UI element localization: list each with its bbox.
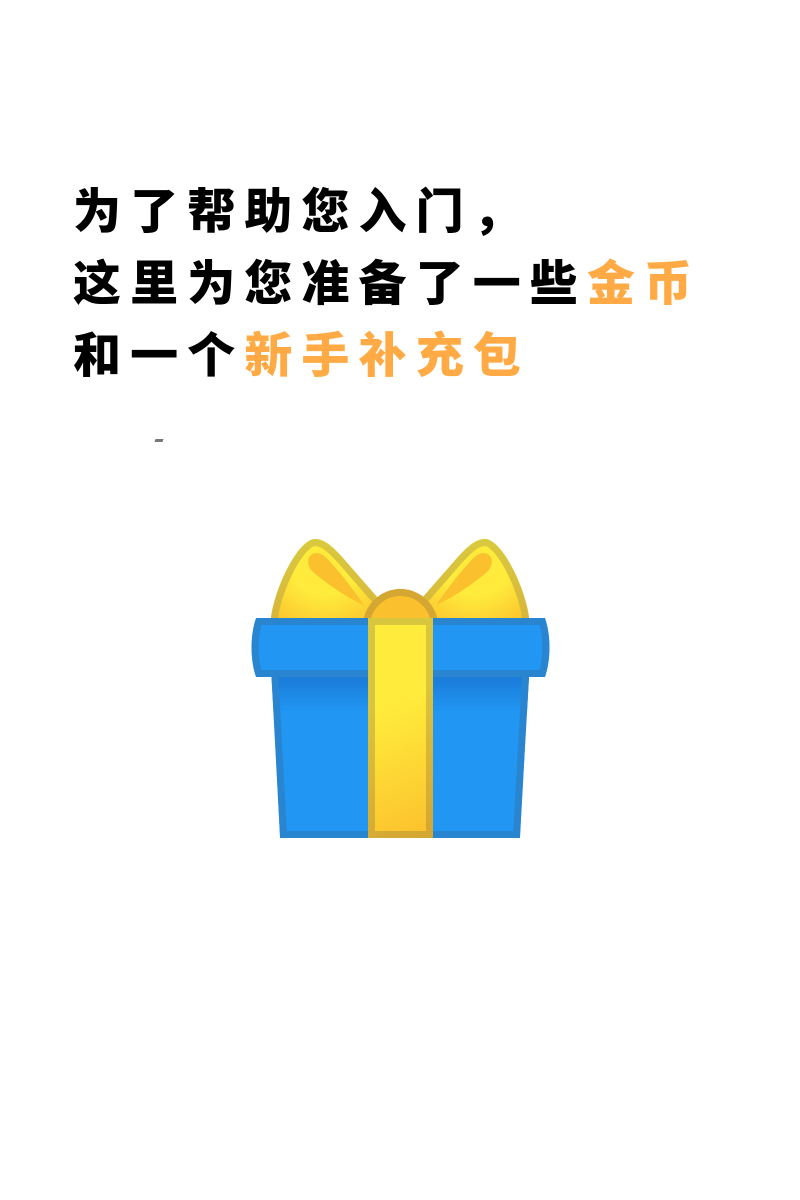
title: 和一个新手补充包 [73,330,530,382]
left bow [270,539,378,618]
title [73,186,701,382]
icon: gift box [252,539,550,838]
title: 为了帮助您入门， [73,186,530,238]
ribbon [368,618,433,838]
box body [272,670,529,838]
small dash mark [154,439,164,442]
box lid [252,618,550,677]
bow knot [364,589,438,618]
right bow [423,539,530,618]
title: 这里为您准备了一些金币 [73,258,701,310]
